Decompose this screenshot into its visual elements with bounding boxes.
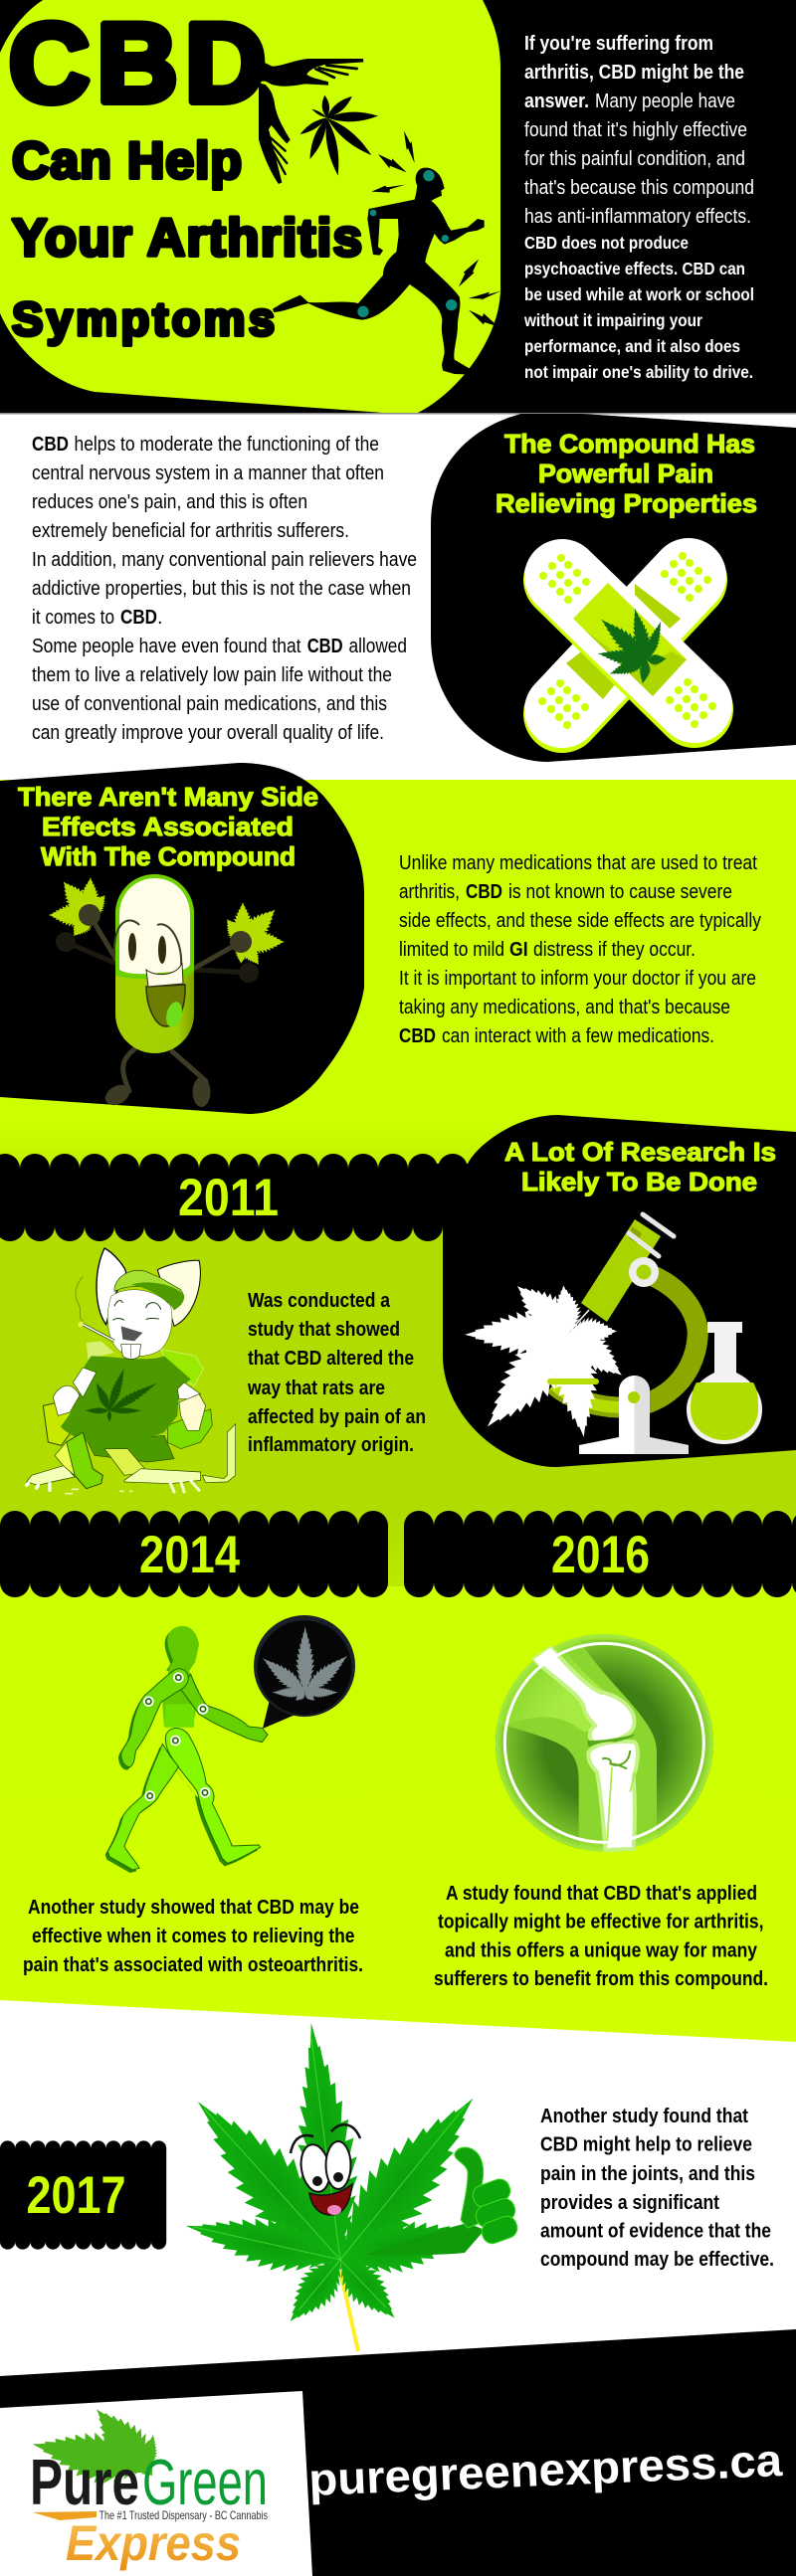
rat study text: affected by pain of an bbox=[248, 1406, 426, 1428]
intro text: Many people have bbox=[595, 91, 735, 112]
heading: Likely To Be Done bbox=[521, 1167, 757, 1196]
panel: pain relieving text: it comes to bbox=[32, 607, 114, 629]
intro text: CBD does not produce bbox=[524, 233, 689, 253]
title: Your Arthritis bbox=[12, 209, 362, 268]
panel: pain relieving text: In addition, many conventional pain relievers have bbox=[32, 549, 417, 571]
icon: microscope and flask with leaf bbox=[465, 1214, 762, 1454]
side effects text: GI bbox=[509, 939, 528, 961]
intro text: for this painful condition, and bbox=[524, 148, 745, 170]
panel: pain relieving text: . bbox=[157, 607, 163, 629]
intro text: without it impairing your bbox=[523, 310, 702, 330]
icon: walking figure with joints bbox=[105, 1626, 268, 1873]
side effects text: CBD bbox=[466, 881, 502, 903]
panel: pain relieving text: central nervous system in a manner that often bbox=[32, 462, 384, 484]
intro text: not impair one's ability to drive. bbox=[524, 362, 753, 382]
intro text: psychoactive effects. CBD can bbox=[524, 259, 745, 278]
heading: A Lot Of Research Is bbox=[504, 1137, 776, 1167]
panel: 2011 band bbox=[0, 1154, 468, 1241]
year 2017: 2017 bbox=[26, 2166, 125, 2225]
icon: smiling leaf with thumbs up bbox=[172, 2019, 520, 2351]
heading: Powerful Pain bbox=[538, 459, 713, 488]
rat study text: study that showed bbox=[248, 1319, 400, 1341]
title bbox=[9, 1, 362, 345]
rat study text: inflammatory origin. bbox=[248, 1434, 414, 1456]
panel: pain relieving text bbox=[32, 434, 417, 744]
panel: research bbox=[418, 1115, 796, 1467]
heading bbox=[504, 1137, 776, 1196]
rat study text: way that rats are bbox=[247, 1378, 385, 1399]
panel: 2014 band bbox=[0, 1511, 388, 1597]
panel: pain relieving text: addictive properties, but this is not the case when bbox=[32, 578, 411, 600]
logo card bbox=[0, 2391, 312, 2576]
side effects text: distress if they occur. bbox=[533, 939, 696, 961]
logo card: Green bbox=[142, 2446, 268, 2518]
logo card: Express bbox=[66, 2515, 241, 2571]
rat study text bbox=[247, 1290, 426, 1456]
panel: compound properties bbox=[431, 414, 796, 762]
2014 study text: effective when it comes to relieving the bbox=[32, 1926, 354, 1947]
panel: pain relieving text: reduces one's pain, and this is often bbox=[32, 491, 307, 513]
panel: footer bbox=[0, 2329, 796, 2576]
title: Symptoms bbox=[12, 292, 275, 345]
heading: There Aren't Many Side bbox=[18, 782, 318, 812]
title: Can Help bbox=[12, 132, 242, 190]
heading: Relieving Properties bbox=[496, 488, 757, 518]
panel: pain relieving text: CBD bbox=[120, 607, 157, 629]
panel: pain relieving text: extremely beneficial for arthritis sufferers. bbox=[32, 520, 349, 542]
2016 study text bbox=[434, 1883, 768, 1990]
year 2014: 2014 bbox=[139, 1526, 240, 1584]
2014 study text: Another study showed that CBD may be bbox=[28, 1897, 359, 1919]
side effects text: is not known to cause severe bbox=[508, 881, 732, 903]
2016 study text: and this offers a unique way for many bbox=[445, 1939, 758, 1961]
panel: pain relieving text: can greatly improve your overall quality of life. bbox=[32, 722, 384, 744]
icon: happy pill mascot bbox=[49, 874, 285, 1109]
side effects text: arthritis, bbox=[399, 881, 460, 903]
panel: 2017 band bbox=[0, 2140, 166, 2250]
panel: pain relieving text: them to live a relatively low pain life without the bbox=[32, 664, 392, 686]
hero lime blob bbox=[0, 0, 500, 413]
panel: pain relieving text: allowed bbox=[348, 636, 407, 657]
intro text: found that it's highly effective bbox=[524, 119, 747, 141]
intro text: answer. bbox=[524, 91, 589, 112]
intro text: has anti-inflammatory effects. bbox=[524, 206, 751, 228]
icon: logo leaves bbox=[27, 2395, 169, 2493]
side effects text: can interact with a few medications. bbox=[442, 1025, 714, 1047]
intro text: that's because this compound bbox=[524, 177, 754, 199]
year 2011: 2011 bbox=[178, 1169, 279, 1227]
panel: hero bbox=[0, 0, 796, 414]
panel: pain relieving text: helps to moderate the functioning of the bbox=[74, 434, 379, 456]
panel: pain relieving text: CBD bbox=[307, 636, 343, 657]
website url: puregreenexpress.ca bbox=[307, 2434, 783, 2505]
2017 study text: pain in the joints, and this bbox=[540, 2163, 755, 2185]
panel: side effects bbox=[0, 763, 364, 1114]
figure shadow bbox=[105, 1629, 258, 1873]
panel: pain relieving text: CBD bbox=[32, 434, 69, 456]
icon: pain lightning bolts bbox=[371, 131, 500, 326]
side effects text: limited to mild bbox=[399, 939, 504, 961]
panel: pain relieving text: use of conventional pain medications, and this bbox=[32, 693, 387, 715]
panel: pain relieving text: Some people have even found that bbox=[32, 636, 301, 657]
heading bbox=[496, 429, 757, 518]
intro text bbox=[523, 33, 754, 382]
heading bbox=[18, 782, 318, 871]
icon: small black leaf bbox=[298, 93, 378, 176]
icon: reaching hands bbox=[259, 59, 363, 184]
heading: Effects Associated bbox=[42, 812, 294, 841]
icon: relaxed rat in chair bbox=[27, 1248, 236, 1494]
2017 study text bbox=[540, 2106, 774, 2271]
side effects text: CBD bbox=[399, 1025, 436, 1047]
intro text: If you're suffering from bbox=[524, 33, 713, 55]
intro text: performance, and it also does bbox=[524, 336, 740, 356]
title: CBD bbox=[9, 1, 266, 125]
side effects text bbox=[399, 852, 761, 1047]
2014 study text: pain that's associated with osteoarthritis. bbox=[23, 1954, 363, 1976]
icon: running figure bbox=[273, 168, 485, 375]
panel: 2016 band bbox=[404, 1511, 796, 1597]
intro text: arthritis, CBD might be the bbox=[524, 62, 744, 84]
section background: lime bbox=[0, 780, 796, 1128]
logo card: Pure bbox=[30, 2446, 139, 2518]
logo card: The #1 Trusted Dispensary - BC Cannabis bbox=[100, 2508, 268, 2522]
2017 study text: provides a significant bbox=[540, 2192, 719, 2214]
icon: knee joint x-ray bbox=[495, 1633, 716, 1852]
heading: With The Compound bbox=[41, 841, 296, 871]
section background: bright lime bbox=[0, 1586, 796, 2042]
2016 study text: A study found that CBD that's applied bbox=[446, 1883, 757, 1905]
2017 study text: Another study found that bbox=[540, 2106, 748, 2127]
rat study text: Was conducted a bbox=[248, 1290, 391, 1312]
heading: The Compound Has bbox=[504, 429, 755, 459]
2014 study text bbox=[23, 1897, 363, 1976]
icon: speech bubble with leaf bbox=[254, 1615, 355, 1729]
section background: olive bbox=[0, 1124, 796, 1586]
rat study text: that CBD altered the bbox=[248, 1348, 414, 1370]
intro text: be used while at work or school bbox=[524, 284, 754, 304]
2017 study text: CBD might help to relieve bbox=[540, 2134, 752, 2156]
icon: crossed bandages with leaf bbox=[538, 552, 716, 729]
year 2016: 2016 bbox=[551, 1526, 650, 1584]
side effects text: taking any medications, and that's because bbox=[399, 997, 730, 1018]
